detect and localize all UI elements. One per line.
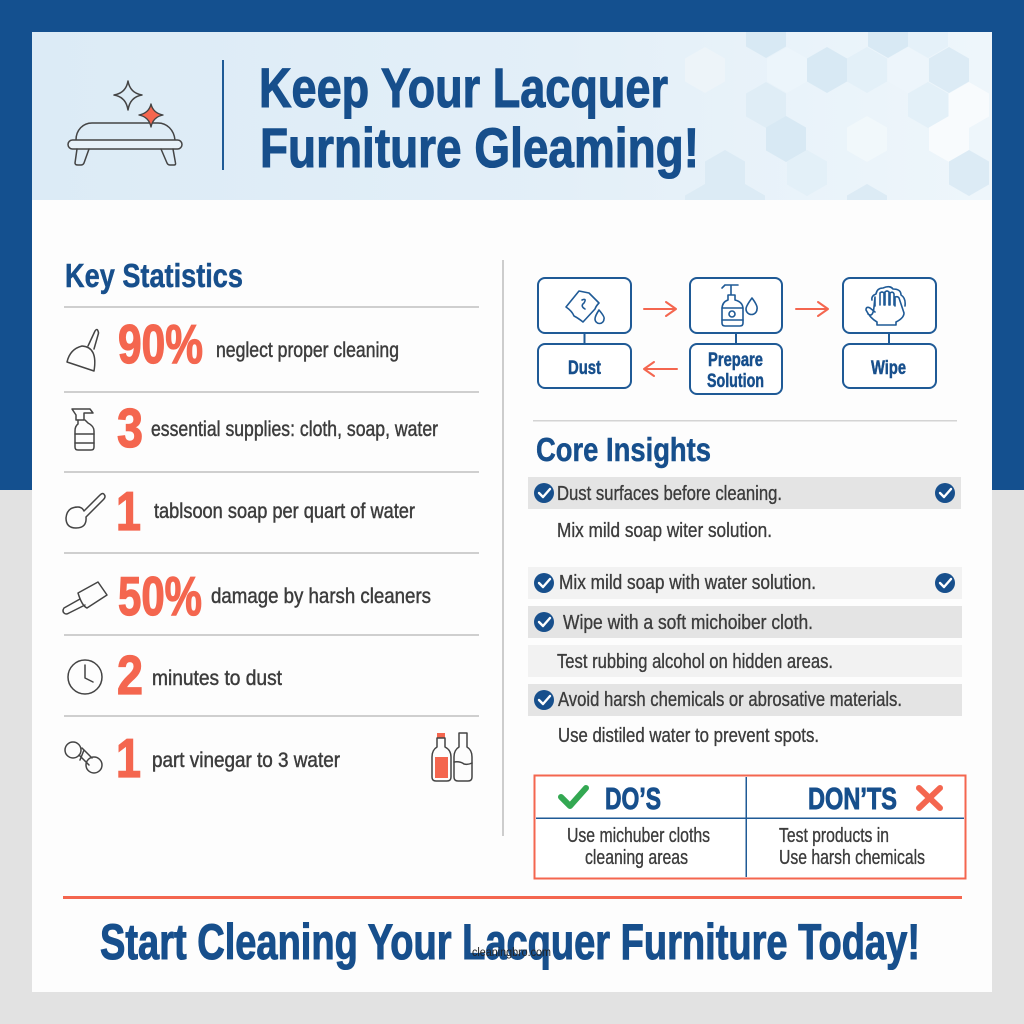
insight rows xyxy=(528,477,962,716)
stat: 50% xyxy=(63,565,431,627)
do's text xyxy=(567,825,710,869)
insight text: Avoid harsh chemicals or abrosative materials. xyxy=(558,689,902,711)
heading: core insights: Core Insights xyxy=(536,431,711,468)
don'ts text: Test products in xyxy=(779,825,889,847)
step: wipe xyxy=(843,278,936,388)
stat: 3 xyxy=(72,397,438,459)
icon: clock xyxy=(68,660,102,694)
step: wipe: Wipe xyxy=(871,358,906,379)
icon: gleaming furniture xyxy=(68,81,182,165)
stat: 90%: 90% xyxy=(118,313,203,375)
row dividers xyxy=(64,306,479,717)
icon: spoon xyxy=(66,494,105,528)
stat: 2 xyxy=(68,644,282,706)
heading: do's: DO’S xyxy=(605,781,661,816)
icon: dustpan xyxy=(67,330,98,371)
arrow: dust to prepare xyxy=(644,302,676,316)
header band xyxy=(32,32,992,200)
stat: 2: minutes to dust xyxy=(152,667,282,690)
stat: 50%: damage by harsh cleaners xyxy=(211,585,431,608)
don'ts text xyxy=(779,825,925,869)
divider above insights xyxy=(533,420,957,422)
icon: bottles xyxy=(432,733,472,781)
stat: 1 vinegar xyxy=(65,727,472,789)
insight text: Mix mild soap with water solution. xyxy=(559,572,816,594)
stat: 1 tablespoon: tablsoon soap per quart of water xyxy=(154,500,415,523)
don'ts text: Use harsh chemicals xyxy=(779,847,925,869)
process flow xyxy=(538,278,936,394)
panel: core insights xyxy=(528,431,962,747)
title: Keep Your Lacquer xyxy=(259,56,668,119)
step: prepare solution: Prepare xyxy=(708,350,763,371)
stat: 50%: 50% xyxy=(118,565,202,627)
icon: scraper xyxy=(63,582,107,614)
arrow: prepare to wipe xyxy=(796,302,828,316)
icon: soap bottle and drop xyxy=(722,285,757,326)
icon: spray bottle xyxy=(72,409,94,450)
panel: do's and don'ts xyxy=(534,776,966,878)
title xyxy=(259,56,699,179)
insight text xyxy=(557,483,902,747)
insight text: Use distiled water to prevent spots. xyxy=(558,725,819,747)
stat: 2: 2 xyxy=(117,644,143,706)
stat: 1 vinegar: 1 xyxy=(116,727,141,789)
insight text: Dust surfaces before cleaning. xyxy=(557,483,782,505)
panel: key statistics xyxy=(63,257,479,789)
insight text: Test rubbing alcohol on hidden areas. xyxy=(557,651,833,673)
icon: green check xyxy=(561,788,586,806)
column divider xyxy=(502,260,504,836)
icon: red cross xyxy=(919,788,940,808)
stat: 1 tablespoon xyxy=(66,480,415,542)
stat: 1 vinegar: part vinegar to 3 water xyxy=(152,749,340,772)
arrow: prepare back to dust xyxy=(644,362,677,376)
step: dust: Dust xyxy=(568,358,602,379)
watermark: cleaningbro.com xyxy=(472,947,551,959)
icon: cloth and drop xyxy=(566,291,604,324)
check badges xyxy=(534,483,955,710)
stat: 90% xyxy=(67,313,399,375)
stat: 90%: neglect proper cleaning xyxy=(216,339,399,362)
icon: linked circles xyxy=(65,742,102,773)
do's text: Use michuber cloths xyxy=(567,825,710,847)
stat: 1 tablespoon: 1 xyxy=(116,480,141,542)
step: dust xyxy=(538,278,631,388)
stat: 3: 3 xyxy=(117,397,143,459)
heading: key statistics: Key Statistics xyxy=(65,257,243,294)
insight text: Wipe with a soft michoiber cloth. xyxy=(563,612,813,634)
header divider xyxy=(222,60,224,170)
do's text: cleaning areas xyxy=(585,847,688,869)
step: prepare solution xyxy=(690,278,782,394)
step: prepare solution: Solution xyxy=(707,371,764,392)
heading: don'ts: DON’TS xyxy=(808,781,897,816)
icon: hand and cloth xyxy=(866,287,905,325)
title: Furniture Gleaming! xyxy=(260,116,699,179)
insight text: Mix mild soap witer solution. xyxy=(557,520,772,542)
footer rule xyxy=(63,896,962,899)
stat: 3: essential supplies: cloth, soap, water xyxy=(151,418,438,441)
